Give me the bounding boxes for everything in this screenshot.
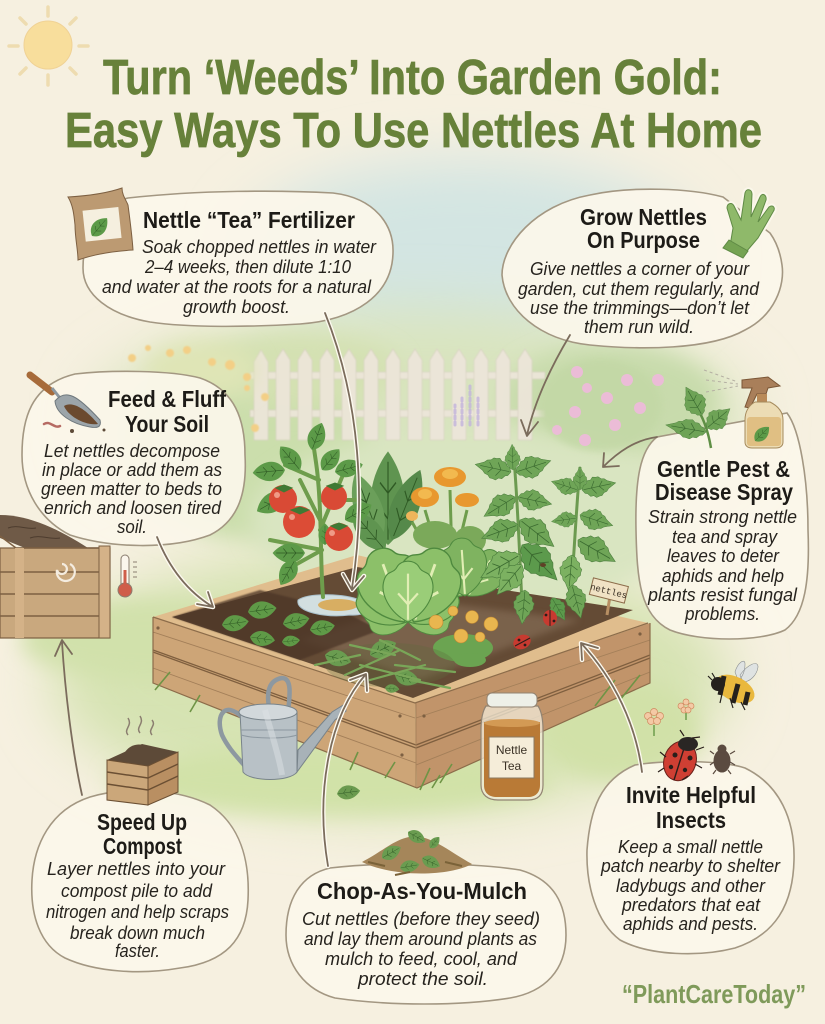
heading: Grow Nettles <box>580 204 707 230</box>
arrow: tea to puddle <box>325 313 364 590</box>
panel: nettle tea fertilizer <box>83 191 393 326</box>
body text: Let nettles decompose <box>44 441 220 461</box>
panel: feed and fluff your soil <box>22 371 245 546</box>
body text: Layer nettles into your <box>47 859 226 879</box>
body text: use the trimmings—don’t let <box>530 298 750 318</box>
arrow: grow nettles <box>521 335 570 436</box>
chopped nettle mulch on bed <box>315 635 455 693</box>
icon: nettle sprig <box>664 382 737 448</box>
heading: Speed Up <box>97 809 187 835</box>
heading <box>97 809 187 859</box>
lettuce <box>343 536 514 641</box>
heading: Your Soil <box>125 411 209 437</box>
panel: chop-as-you-mulch <box>286 864 566 1004</box>
sun <box>9 7 88 85</box>
bubble outline <box>502 189 783 348</box>
nettle tea jar: Nettle <box>496 743 527 757</box>
arrow: pest spray <box>603 437 657 467</box>
body text: patch nearby to shelter <box>600 856 781 876</box>
body text: aphids and pests. <box>623 914 758 934</box>
body text: Give nettles a corner of your <box>530 259 750 279</box>
body text <box>302 909 540 989</box>
body text: plants resist fungal <box>647 585 798 605</box>
body text <box>600 837 781 934</box>
arrow: compost <box>55 640 82 795</box>
icon: garden glove <box>723 190 774 258</box>
nettle tea jar: Tea <box>502 759 521 773</box>
body text: break down much <box>70 923 205 943</box>
watering can <box>220 678 346 780</box>
icon: thermometer <box>118 555 137 597</box>
icon: spray bottle <box>704 370 783 448</box>
flowers in bed <box>429 606 498 667</box>
heading: Disease Spray <box>655 479 793 505</box>
panel: speed up compost <box>32 790 248 972</box>
seedlings <box>221 599 336 648</box>
body text <box>102 237 377 317</box>
body text: nitrogen and help scraps <box>46 902 229 922</box>
body text: aphids and help <box>662 566 784 586</box>
body text: and water at the roots for a natural <box>102 277 372 297</box>
title: Turn ‘Weeds’ Into Garden Gold: <box>103 51 722 105</box>
body text <box>647 507 798 624</box>
body text: soil. <box>117 517 147 537</box>
body text: Strain strong nettle <box>648 507 797 527</box>
icon: compost crate <box>107 716 178 805</box>
back greens <box>342 451 433 558</box>
title <box>65 51 762 158</box>
body text: in place or add them as <box>42 460 222 480</box>
panel: grow nettles on purpose <box>502 189 783 348</box>
raised garden bed <box>153 555 650 790</box>
panel: invite helpful insects <box>587 762 794 954</box>
heading: Insects <box>656 807 726 833</box>
nettle tea jar <box>481 693 543 800</box>
nettles sign: nettles <box>589 583 628 601</box>
marigolds <box>406 467 486 560</box>
body text: 2–4 weeks, then dilute 1:10 <box>144 257 351 277</box>
icon: trowel with soil <box>30 375 106 433</box>
heading <box>108 386 226 437</box>
body text: mulch to feed, cool, and <box>325 949 518 969</box>
bubble outline <box>587 762 794 954</box>
body text: enrich and loosen tired <box>44 498 222 518</box>
body text <box>518 259 760 337</box>
arrow: chop and mulch <box>323 674 367 866</box>
bubble outline <box>83 191 393 326</box>
bubble outline <box>286 864 566 1004</box>
garden background: flowers and fence <box>128 342 664 451</box>
heading <box>626 782 756 833</box>
body text <box>41 441 222 537</box>
heading <box>655 456 793 505</box>
body text: and lay them around plants as <box>304 929 537 949</box>
icon: compost bin <box>0 515 110 638</box>
body text: problems. <box>684 604 760 624</box>
arrow: helpful insects <box>581 643 642 772</box>
heading: On Purpose <box>587 227 700 253</box>
body text: Cut nettles (before they seed) <box>302 909 540 929</box>
heading <box>580 204 707 253</box>
heading: Compost <box>103 833 182 859</box>
body text: Keep a small nettle <box>618 837 763 857</box>
icon: small beetle <box>710 745 735 774</box>
panel: gentle pest and disease spray <box>636 413 808 639</box>
body text: faster. <box>115 941 160 961</box>
heading: Chop-As-You-Mulch <box>317 878 527 904</box>
water puddle <box>298 595 369 616</box>
arrow: soil to bed <box>157 537 213 607</box>
heading: Nettle “Tea” Fertilizer <box>143 207 355 233</box>
stray leaf on grass <box>336 784 361 801</box>
heading: Invite Helpful <box>626 782 756 808</box>
icon: bumble bee <box>708 661 759 710</box>
body text: compost pile to add <box>61 881 213 901</box>
nettles sign <box>588 578 629 615</box>
body text: tea and spray <box>672 527 778 547</box>
bubble outline <box>636 413 808 639</box>
body text: Soak chopped nettles in water <box>142 237 377 257</box>
body text: ladybugs and other <box>616 876 766 896</box>
garden flowers by the bed <box>644 699 694 736</box>
body text: them run wild. <box>584 317 694 337</box>
heading: Gentle Pest & <box>657 456 790 482</box>
bubble outline <box>22 371 245 546</box>
body text: predators that eat <box>621 895 761 915</box>
icon: ladybug <box>658 730 704 785</box>
heading: Feed & Fluff <box>108 386 226 412</box>
body text: leaves to deter <box>667 546 780 566</box>
ladybugs in bed <box>511 610 557 652</box>
body text: garden, cut them regularly, and <box>518 279 760 299</box>
tomato plant <box>252 420 376 597</box>
body text: growth boost. <box>183 297 290 317</box>
icon: fertilizer bag <box>68 188 133 260</box>
icon: mulch pile <box>362 827 472 875</box>
nettle plants <box>473 444 622 625</box>
body text: green matter to beds to <box>41 479 222 499</box>
body text <box>46 859 229 961</box>
bubble outline <box>32 790 248 972</box>
body text: protect the soil. <box>357 969 488 989</box>
